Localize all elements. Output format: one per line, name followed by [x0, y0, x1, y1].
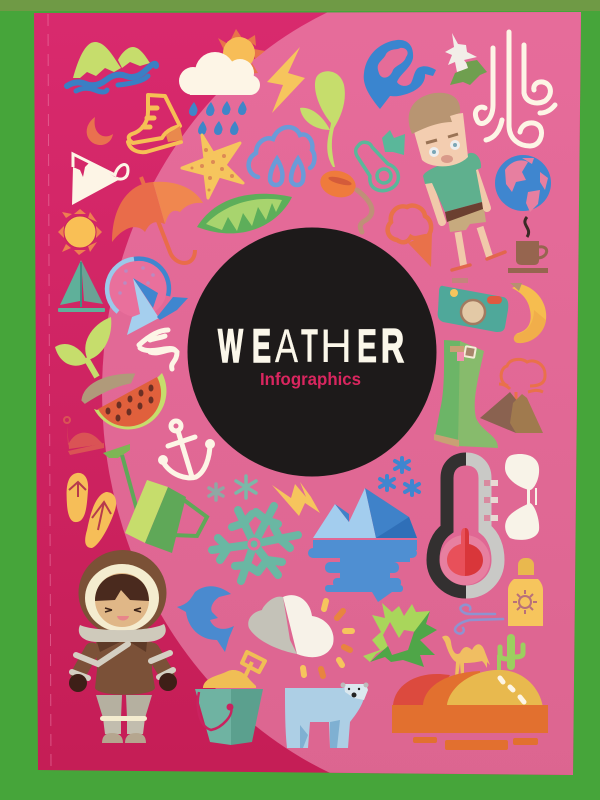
icon: snowy mountain: [72, 154, 128, 205]
coat: [95, 642, 155, 695]
icon: rain cloud outline: [249, 127, 314, 185]
hood: [78, 550, 166, 636]
icon: small snowflakes: [209, 476, 256, 500]
title: A: [275, 319, 298, 372]
icon: wind swirls: [475, 32, 555, 146]
title: R: [381, 319, 404, 372]
icon: watermelon: [94, 373, 166, 429]
title: T: [301, 319, 318, 372]
icon: umbrella: [112, 177, 203, 263]
icon: leaf: [197, 194, 292, 233]
icon: breeze: [455, 605, 503, 634]
icon: rain drops: [189, 101, 247, 135]
icon: watering can: [103, 444, 207, 553]
character: boy: [409, 93, 505, 270]
icon: sunglasses: [505, 454, 539, 540]
title: E: [252, 319, 271, 372]
icon: big snowflake: [212, 506, 298, 581]
icon: polar bear: [285, 682, 368, 748]
icon: desert hills: [392, 670, 548, 750]
icon: wellington boot: [434, 340, 498, 448]
icon: flip flops: [67, 473, 116, 548]
icon: ice cream: [388, 206, 432, 267]
icon: seedling with seed: [300, 71, 372, 232]
fur trims: [72, 644, 173, 678]
icon: crescent moon: [87, 117, 113, 145]
arms: [78, 650, 167, 675]
icon: camera: [438, 278, 508, 332]
icon: blue snowflakes: [380, 458, 419, 495]
icon: large thermometer: [433, 459, 498, 592]
icon: snow globe: [107, 259, 188, 335]
icon: lightning bolt: [267, 47, 305, 113]
icon: ocean wave: [364, 40, 436, 109]
title: E: [357, 319, 377, 372]
fur collar: [79, 624, 166, 642]
black title circle: [188, 228, 436, 476]
icon: camel: [442, 636, 490, 677]
icon: red hat: [64, 417, 104, 455]
icon: ice skate: [128, 95, 183, 152]
icon: yellow lightning: [272, 482, 320, 516]
icon: snowy tree: [445, 33, 487, 85]
icon: key thermometer and leaf: [356, 130, 405, 191]
subtitle: Infographics: [260, 369, 361, 389]
icon: banana: [510, 283, 546, 343]
title: H: [320, 319, 352, 372]
icon: iceberg: [308, 488, 417, 602]
icon: cactus: [497, 634, 523, 670]
icon: sailboat: [58, 260, 105, 312]
icon: sun behind cloud: [179, 29, 265, 95]
character: inuit child: [69, 550, 177, 743]
icon: anchor: [161, 421, 212, 478]
trousers and boots: [96, 695, 152, 743]
icon: coffee cup: [508, 217, 548, 273]
icon: sunscreen bottle: [508, 558, 543, 626]
icon: globe: [495, 155, 551, 212]
icon: sand bucket and spade: [195, 652, 265, 745]
icon: dolphin: [177, 586, 234, 652]
title: W: [218, 319, 243, 372]
icon: maple leaf outline: [363, 603, 437, 667]
icon: volcano: [480, 359, 545, 433]
icon: small sun: [58, 209, 102, 255]
icon: cloud with sun rays: [248, 595, 352, 676]
mittens: [69, 673, 177, 692]
icon: starfish: [182, 135, 243, 198]
icon: tornado: [139, 330, 177, 369]
icon: mountains and waves: [67, 42, 156, 92]
icon: seedling and soil: [55, 317, 133, 402]
